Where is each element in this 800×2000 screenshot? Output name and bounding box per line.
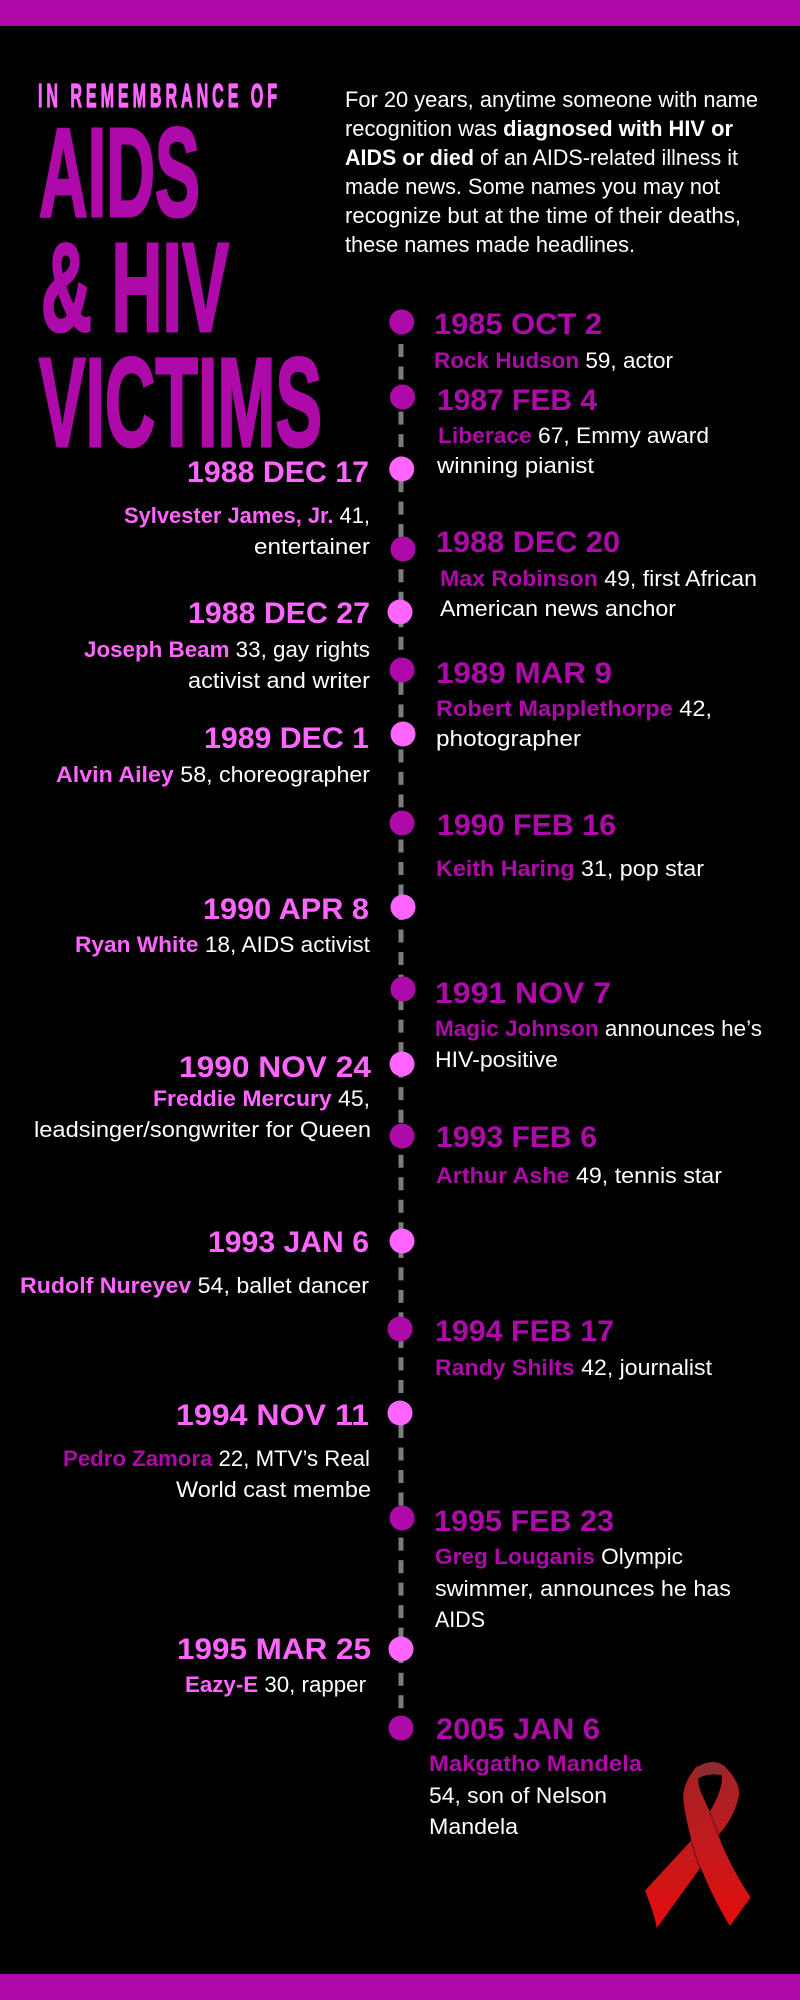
entry: Randy Shilts: Randy Shilts 42, journalist [435, 1355, 712, 1380]
entry: Greg Louganis: 1995 FEB 23 [434, 1505, 614, 1538]
entry: Freddie Mercury: Freddie Mercury 45, [153, 1086, 370, 1111]
entry: Magic Johnson: 1991 NOV 7 [435, 977, 611, 1010]
entry: Ryan White: 1990 APR 8 [203, 893, 369, 926]
entry: Pedro Zamora: World cast membe [176, 1477, 371, 1502]
entry: Joseph Beam [84, 597, 412, 693]
entry: Alvin Ailey: Alvin Ailey 58, choreographer [56, 762, 370, 787]
bottom bar [0, 1974, 800, 2000]
entry: Makgatho Mandela: Makgatho Mandela [429, 1751, 643, 1776]
entry: Rock Hudson: 1985 OCT 2 [434, 308, 602, 341]
entry: Ryan White: Ryan White 18, AIDS activist [75, 932, 370, 957]
entry: Rudolf Nureyev [20, 1226, 414, 1298]
entry: Alvin Ailey: 1989 DEC 1 [204, 722, 369, 755]
entry: Liberace: winning pianist [436, 453, 594, 478]
entry: Keith Haring: 1990 FEB 16 [437, 809, 616, 842]
entry: Sylvester James, Jr.: 1988 DEC 17 [187, 456, 369, 489]
entry: Robert Mapplethorpe: 1989 MAR 9 [436, 657, 612, 690]
title line: AIDS: AIDS [39, 102, 200, 243]
entry: Greg Louganis: AIDS [435, 1607, 485, 1632]
entry: Sylvester James, Jr. [124, 456, 414, 559]
entry: Randy Shilts [388, 1315, 712, 1380]
entry: Max Robinson: Max Robinson 49, first African [440, 566, 757, 591]
entry: Pedro Zamora: 1994 NOV 11 [176, 1399, 369, 1432]
entry: Max Robinson: 1988 DEC 20 [436, 526, 620, 559]
entry: Magic Johnson: HIV-positive [435, 1047, 558, 1072]
entry: Eazy-E [177, 1633, 414, 1697]
entry: Makgatho Mandela [388, 1713, 643, 1839]
top bar [0, 0, 800, 26]
entry: Robert Mapplethorpe: photographer [436, 726, 581, 751]
entry: Makgatho Mandela: Mandela [429, 1814, 519, 1839]
entry: Arthur Ashe: 1993 FEB 6 [436, 1121, 597, 1154]
entry: Rock Hudson [389, 308, 673, 373]
entry: Keith Haring: Keith Haring 31, pop star [436, 856, 704, 881]
entry: Magic Johnson [390, 976, 762, 1072]
entry: Randy Shilts: 1994 FEB 17 [435, 1315, 614, 1348]
entry: Robert Mapplethorpe [390, 657, 712, 751]
entry: Sylvester James, Jr.: Sylvester James, Jr. 41, [124, 503, 370, 528]
icon: red AIDS ribbon [645, 1762, 751, 1928]
entry: Greg Louganis [390, 1505, 731, 1632]
entry: Magic Johnson: Magic Johnson announces he’s [435, 1016, 762, 1041]
intro paragraph: these names made headlines. [345, 232, 635, 257]
entry: Liberace: Liberace 67, Emmy award [438, 423, 709, 448]
timeline dashed line [398, 322, 404, 1728]
entry: Eazy-E: 1995 MAR 25 [177, 1633, 371, 1666]
entry: Liberace: 1987 FEB 4 [437, 384, 597, 417]
intro paragraph [345, 87, 758, 257]
intro paragraph: recognition was diagnosed with HIV or [345, 116, 733, 141]
title: IN REMEMBRANCE OF [38, 77, 281, 114]
entry: Joseph Beam: activist and writer [188, 668, 370, 693]
entry: Pedro Zamora [63, 1399, 412, 1502]
intro paragraph: made news. Some names you may not [345, 174, 720, 199]
entry: Joseph Beam: Joseph Beam 33, gay rights [84, 637, 370, 662]
title [38, 77, 322, 473]
entry: Greg Louganis: swimmer, announces he has [435, 1576, 731, 1601]
entry: Arthur Ashe: Arthur Ashe 49, tennis star [436, 1163, 722, 1188]
intro paragraph: For 20 years, anytime someone with name [345, 87, 758, 112]
entry: Eazy-E: Eazy-E 30, rapper [185, 1672, 366, 1697]
entry: Liberace [390, 384, 709, 478]
entry: Keith Haring [390, 809, 704, 881]
title line: VICTIMS: VICTIMS [39, 332, 322, 473]
entry: Freddie Mercury: leadsinger/songwriter for Queen [34, 1117, 371, 1142]
title line: & HIV: & HIV [41, 217, 229, 358]
intro paragraph: recognize but at the time of their deaths, [345, 203, 741, 228]
entry: Robert Mapplethorpe: Robert Mapplethorpe 42, [436, 696, 712, 721]
entry: Arthur Ashe [390, 1121, 722, 1188]
entry: Rudolf Nureyev: 1993 JAN 6 [208, 1226, 369, 1259]
entry: Alvin Ailey [56, 722, 416, 787]
entry: Rudolf Nureyev: Rudolf Nureyev 54, ballet dancer [20, 1273, 369, 1298]
entry: Max Robinson: American news anchor [440, 596, 676, 621]
entry: Freddie Mercury: 1990 NOV 24 [179, 1051, 371, 1084]
entry: Ryan White [75, 893, 416, 957]
entry: Makgatho Mandela: 2005 JAN 6 [436, 1713, 600, 1746]
intro paragraph: AIDS or died of an AIDS-related illness it [345, 145, 738, 170]
entry: Joseph Beam: 1988 DEC 27 [188, 597, 370, 630]
entry: Pedro Zamora: Pedro Zamora 22, MTV’s Real [63, 1446, 370, 1471]
entry: Rock Hudson: Rock Hudson 59, actor [434, 348, 673, 373]
entry: Makgatho Mandela: 54, son of Nelson [429, 1783, 607, 1808]
entry: Sylvester James, Jr.: entertainer [254, 534, 370, 559]
entry: Greg Louganis: Greg Louganis Olympic [435, 1544, 683, 1569]
entry: Max Robinson [390, 526, 757, 621]
entry: Freddie Mercury [34, 1051, 414, 1142]
